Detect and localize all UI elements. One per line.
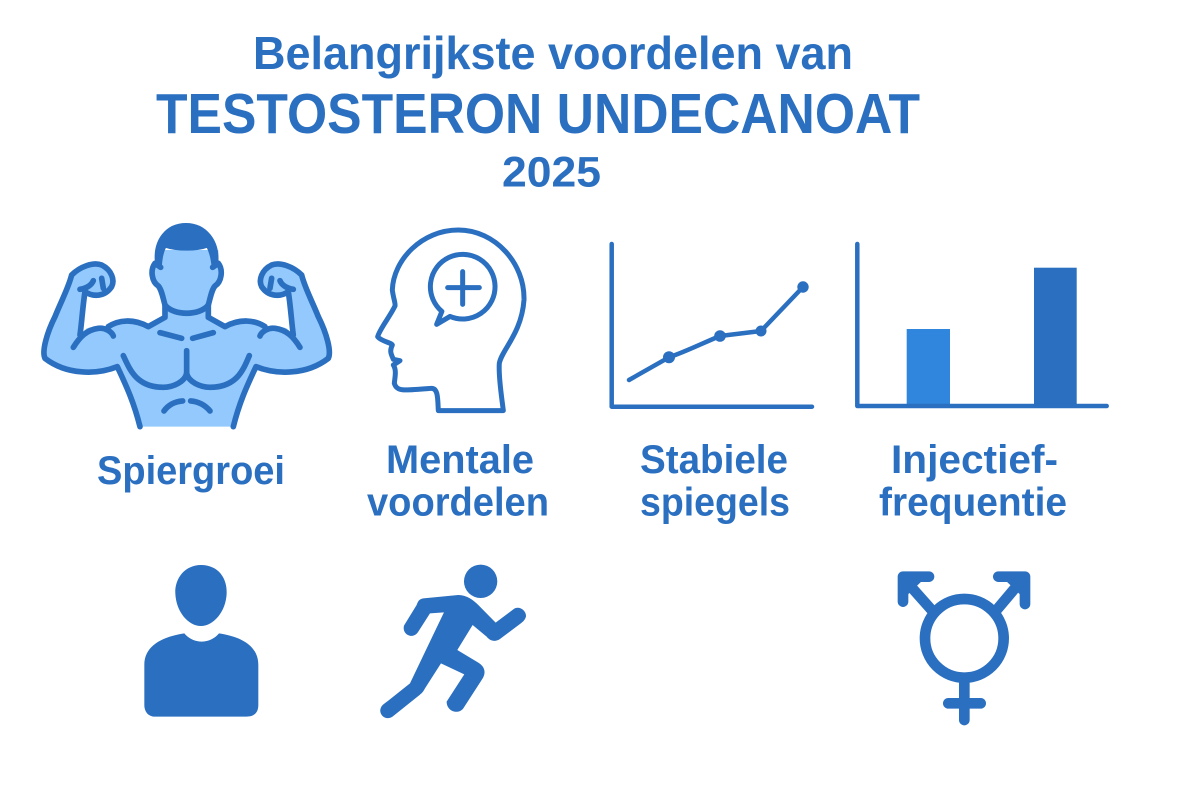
icon: runner xyxy=(380,565,526,718)
label: Stabiele spiegels xyxy=(640,438,790,524)
axes xyxy=(857,244,1107,406)
bar chart icon xyxy=(857,244,1107,406)
outlines xyxy=(44,263,329,427)
year: 2025 xyxy=(502,148,601,196)
label: Injectief-frequentie xyxy=(879,438,1067,524)
head outline xyxy=(378,230,524,411)
line chart icon xyxy=(612,244,812,407)
label: Spiergroei: Spiergroei xyxy=(97,449,285,493)
title line 1: Belangrijkste voordelen van xyxy=(253,27,853,79)
plus sign xyxy=(448,272,479,304)
axes xyxy=(612,244,812,407)
data points xyxy=(663,281,809,363)
label: Mentale voordelen: Mentale xyxy=(386,438,534,482)
trend line xyxy=(629,287,803,380)
speech bubble xyxy=(430,254,495,324)
bar high xyxy=(1034,268,1077,406)
label: Mentale voordelen: voordelen xyxy=(367,480,549,524)
icon: muscular man xyxy=(44,224,329,427)
label: Injectief-frequentie: frequentie xyxy=(879,480,1067,524)
bar low xyxy=(907,329,950,406)
label: Stabiele spiegels: Stabiele xyxy=(640,438,788,482)
label: Stabiele spiegels: spiegels xyxy=(640,480,790,524)
icon: person xyxy=(144,565,258,717)
hair xyxy=(156,224,218,268)
icon: head with plus speech bubble xyxy=(378,230,524,411)
body fill xyxy=(44,250,329,427)
icon: transgender symbol xyxy=(903,577,1025,720)
label: Mentale voordelen xyxy=(367,438,549,524)
title line 2: TESTOSTERON UNDECANOAT xyxy=(156,82,920,146)
title block xyxy=(156,27,920,196)
label: Injectief-frequentie: Injectief- xyxy=(891,438,1058,482)
